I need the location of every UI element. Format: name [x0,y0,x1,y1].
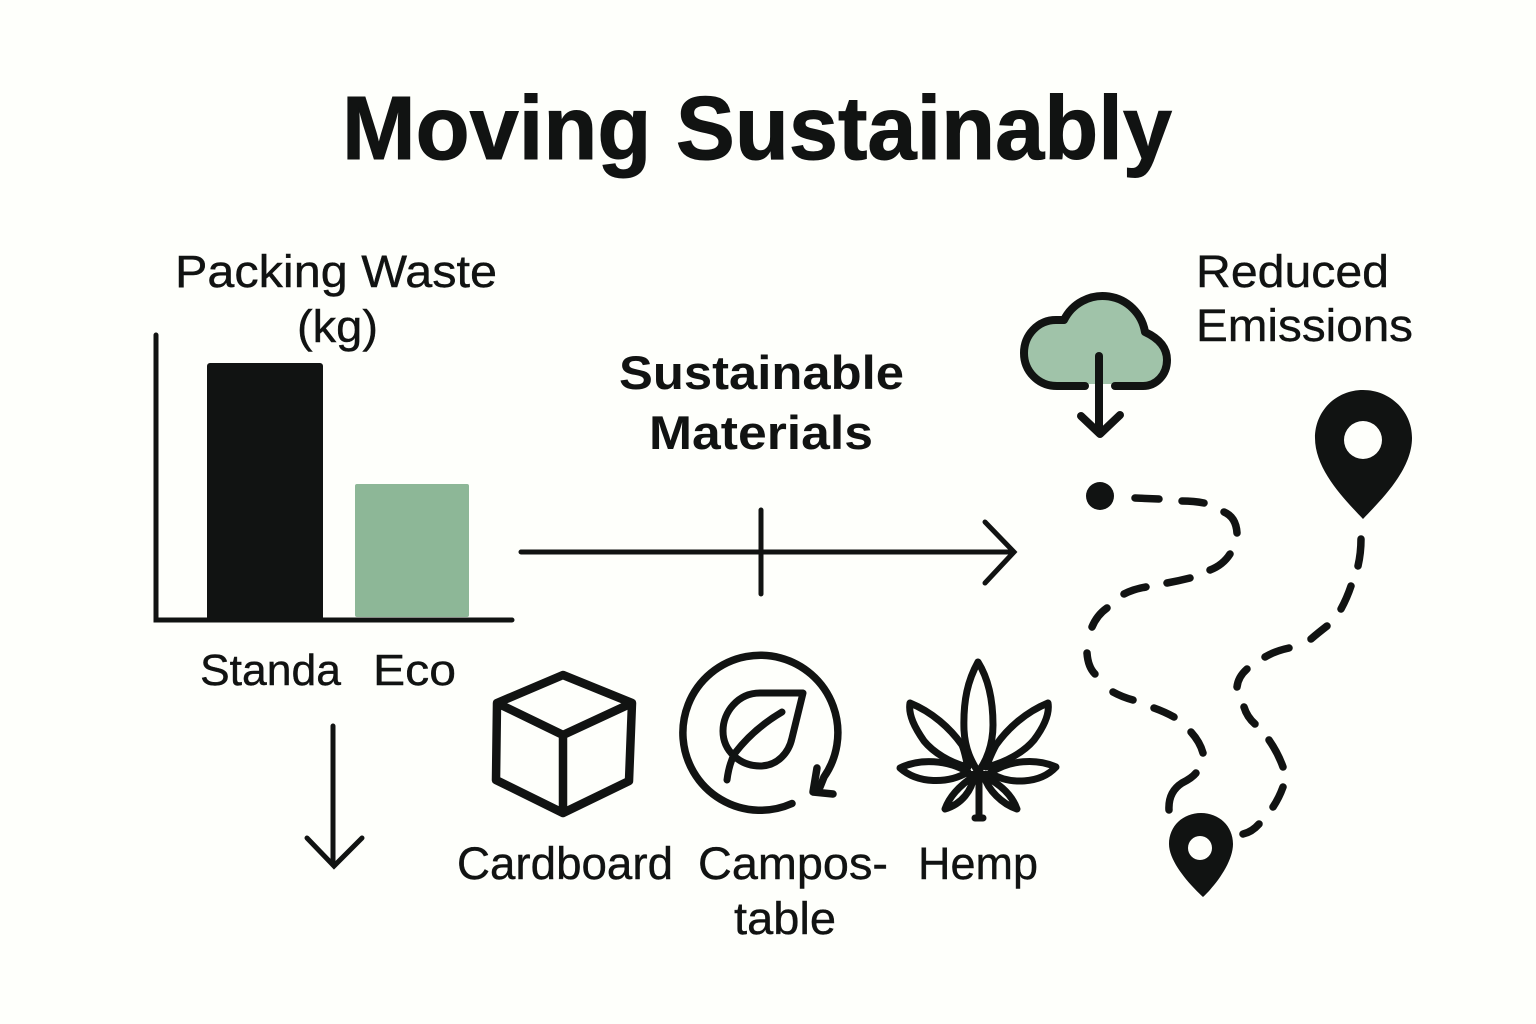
icon: cardboard box [496,675,632,813]
label: reduced emissions: Reduced [1196,246,1389,297]
label: compostable: Campos- [698,838,888,889]
route: dashed path one [1086,482,1237,810]
panel: packing waste chart [156,246,512,866]
bar label: standard: Standa [200,646,342,695]
bar: standard [207,363,323,621]
label: reduced emissions [1196,246,1413,351]
heading: sustainable materials: Materials [649,406,873,459]
arrow: waste down [307,726,362,866]
chart heading: Packing Waste [175,246,497,297]
bar label: eco: Eco [373,646,456,695]
heading: sustainable materials: Sustainable [619,346,904,399]
arrow: materials to route [521,510,1014,594]
heading: sustainable materials [619,346,904,459]
icon: compostable leaf [683,655,838,810]
icon: hemp leaf [900,662,1056,818]
icon: cloud with down arrow [1024,296,1167,434]
title: Moving Sustainably [342,79,1172,179]
route start dot [1086,482,1114,510]
label: compostable: table [734,893,836,944]
chart axes [156,335,512,620]
bar: eco [355,484,469,617]
label: reduced emissions: Emissions [1196,300,1413,351]
icon: large map pin [1315,390,1412,519]
label: hemp: Hemp [918,838,1038,889]
icon: small map pin [1169,813,1233,897]
label: cardboard: Cardboard [457,838,673,889]
label: compostable [698,838,888,944]
route: dashed path two [1237,539,1361,834]
chart heading: (kg) [297,301,378,352]
chart heading [175,246,497,352]
